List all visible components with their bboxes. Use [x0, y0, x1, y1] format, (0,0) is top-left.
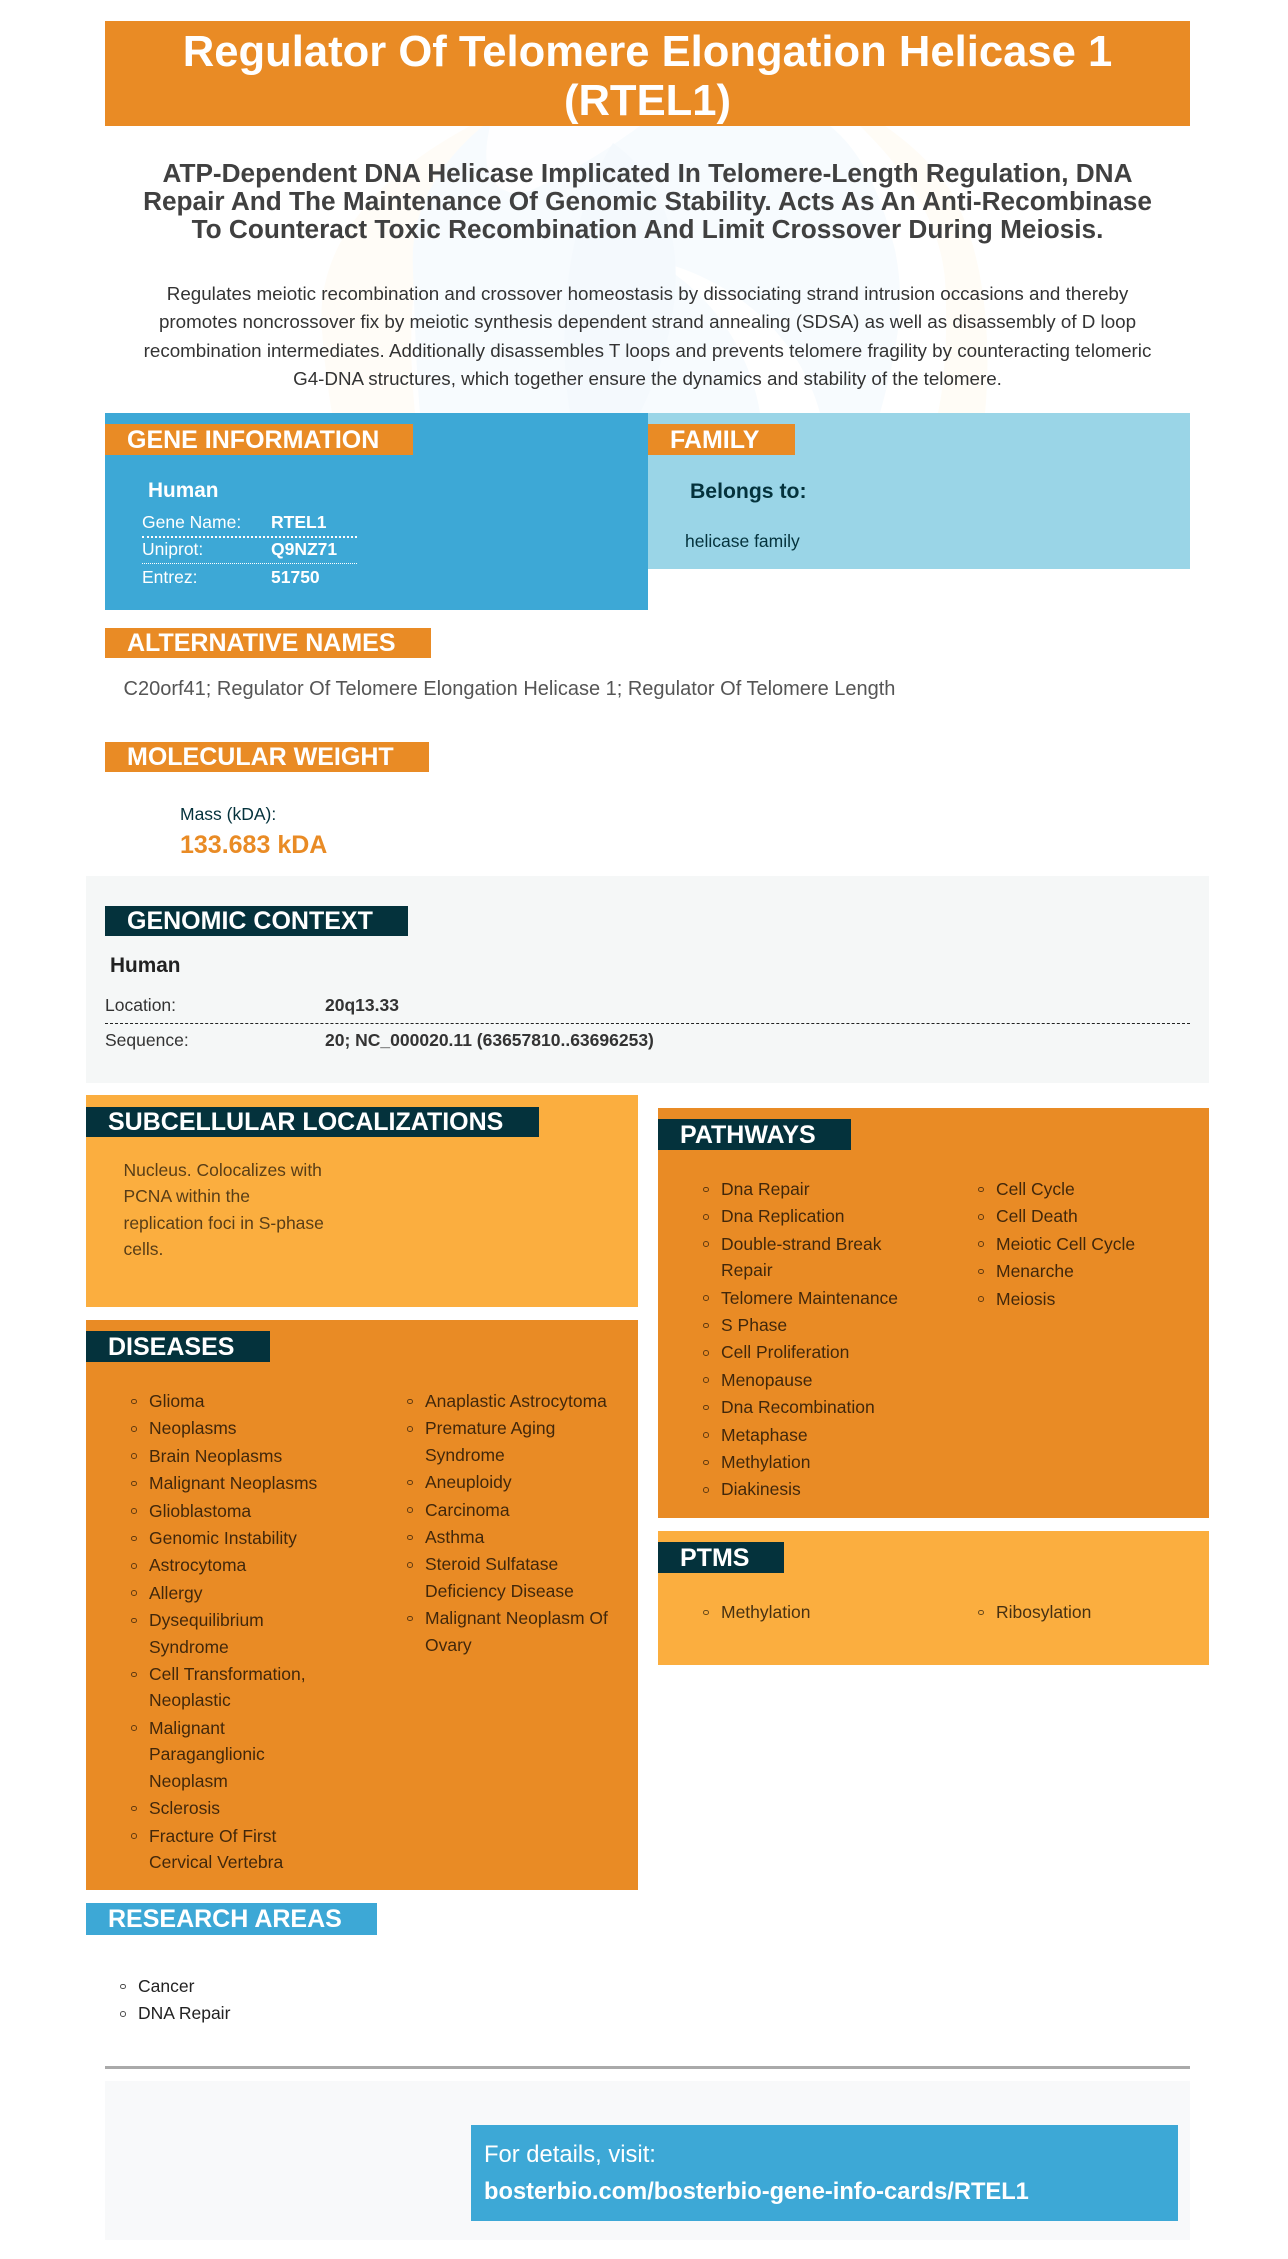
description paragraph: G4-DNA structures, which together ensure the dynamics and stability of the telomere.	[293, 368, 1002, 389]
ptm list column 2: Ribosylation	[996, 1602, 1091, 1622]
disease list column 2: Carcinoma	[425, 1500, 510, 1520]
disease list column 1: Syndrome	[149, 1637, 229, 1657]
footer divider	[105, 2066, 1190, 2069]
disease list column 1: Neoplasms	[149, 1418, 237, 1438]
disease list column 1: Cervical Vertebra	[149, 1852, 283, 1872]
panel: ptms	[658, 1531, 1209, 1665]
research areas list	[120, 1976, 230, 2023]
disease list column 1: Cell Transformation,	[149, 1664, 306, 1684]
description paragraph	[144, 283, 1151, 389]
species label: Human	[148, 479, 218, 502]
research areas list: DNA Repair	[138, 2003, 230, 2023]
disease list column 1: Malignant	[149, 1718, 225, 1738]
family value: helicase family	[685, 531, 800, 551]
pathway list column 1	[703, 1179, 898, 1499]
pathway list column 1: Menopause	[721, 1370, 812, 1390]
disease list column 1: Dysequilibrium	[149, 1610, 264, 1630]
disease list column 2	[407, 1391, 608, 1655]
alternative names text: C20orf41; Regulator Of Telomere Elongation Helicase 1; Regulator Of Telomere Length	[124, 678, 895, 700]
description paragraph: promotes noncrossover fix by meiotic synthesis dependent strand annealing (SDSA) as well as disassembly of D loop	[159, 311, 1136, 332]
research areas list: Cancer	[138, 1976, 194, 1996]
belongs to label: Belongs to:	[690, 480, 807, 503]
localization text: Nucleus. Colocalizes with	[124, 1160, 322, 1180]
background watermark logo	[564, 126, 987, 413]
disease list column 1: Neoplastic	[149, 1690, 231, 1710]
disease list column 2: Asthma	[425, 1527, 484, 1547]
heading: gene information: GENE INFORMATION	[127, 426, 379, 454]
disease list column 1: Genomic Instability	[149, 1528, 297, 1548]
uniprot row: Q9NZ71	[271, 539, 337, 559]
gene name row	[142, 509, 357, 538]
uniprot row	[142, 536, 357, 564]
heading: pathways	[658, 1119, 851, 1150]
entrez row: 51750	[271, 567, 320, 587]
disease list column 2: Steroid Sulfatase	[425, 1554, 558, 1574]
disease list column 1: Allergy	[149, 1583, 202, 1603]
species label: Human	[110, 954, 180, 977]
disease list column 1: Neoplasm	[149, 1771, 228, 1791]
location row: Location:	[105, 995, 176, 1015]
visit label: For details, visit:	[484, 2141, 656, 2168]
sequence row: Sequence:	[105, 1030, 189, 1050]
mass value: 133.683 kDA	[180, 831, 327, 859]
sequence row	[105, 1030, 654, 1050]
localization text: PCNA within the	[124, 1186, 250, 1206]
disease list column 2: Malignant Neoplasm Of	[425, 1608, 608, 1628]
disease list column 1: Sclerosis	[149, 1798, 220, 1818]
url: bosterbio.com/bosterbio-gene-info-cards/RTEL1	[484, 2179, 1029, 2205]
heading: ptms: PTMS	[680, 1544, 749, 1572]
pathway list column 2: Menarche	[996, 1261, 1074, 1281]
disease list column 1: Paraganglionic	[149, 1744, 265, 1764]
heading: diseases: DISEASES	[108, 1333, 234, 1361]
pathway list column 2: Meiosis	[996, 1289, 1055, 1309]
pathway list column 1: Metaphase	[721, 1425, 808, 1445]
ptm list column 1: Methylation	[721, 1602, 810, 1622]
disease list column 2: Syndrome	[425, 1445, 505, 1465]
disease list column 2: Deficiency Disease	[425, 1581, 574, 1601]
mass label: Mass (kDA):	[180, 804, 276, 824]
panel: gene information	[105, 413, 648, 610]
heading: ptms	[658, 1542, 784, 1573]
heading: molecular weight: MOLECULAR WEIGHT	[127, 743, 394, 771]
localization text	[124, 1160, 324, 1259]
pathway list column 1: Dna Repair	[721, 1179, 810, 1199]
description paragraph: recombination intermediates. Additionally disassembles T loops and prevents telomere fragility by counteracting telomeric	[144, 340, 1151, 361]
disease list column 1: Malignant Neoplasms	[149, 1473, 317, 1493]
pathway list column 1: Dna Replication	[721, 1206, 845, 1226]
heading: diseases	[86, 1331, 270, 1362]
localization text: replication foci in S-phase	[124, 1213, 324, 1233]
panel: pathways	[658, 1108, 1209, 1518]
sequence row: 20; NC_000020.11 (63657810..63696253)	[325, 1030, 654, 1050]
panel: family	[648, 413, 1190, 569]
disease list column 2: Premature Aging	[425, 1418, 555, 1438]
heading: genomic context: GENOMIC CONTEXT	[127, 907, 373, 935]
disease list column 1: Fracture Of First	[149, 1826, 276, 1846]
heading: pathways: PATHWAYS	[680, 1121, 816, 1149]
location row: 20q13.33	[325, 995, 399, 1015]
title banner: (RTEL1)	[564, 77, 731, 125]
pathway list column 1: Double-strand Break	[721, 1234, 882, 1254]
disease list column 2: Anaplastic Astrocytoma	[425, 1391, 607, 1411]
heading: family: FAMILY	[670, 426, 759, 454]
heading: alternative names: ALTERNATIVE NAMES	[127, 629, 396, 657]
footer panel	[105, 2081, 1190, 2240]
pathway list column 1: Diakinesis	[721, 1479, 801, 1499]
entrez row	[142, 567, 320, 587]
panel: genomic context	[86, 876, 1209, 1083]
entrez row: Entrez:	[142, 567, 197, 587]
disease list column 1	[131, 1391, 317, 1872]
subtitle: ATP-Dependent DNA Helicase Implicated In Telomere-Length Regulation, DNA	[162, 158, 1133, 188]
location row	[105, 992, 1190, 1024]
pathway list column 1: S Phase	[721, 1315, 787, 1335]
pathway list column 2: Meiotic Cell Cycle	[996, 1234, 1135, 1254]
title banner	[105, 21, 1190, 126]
subtitle	[143, 158, 1152, 244]
description paragraph: Regulates meiotic recombination and crossover homeostasis by dissociating strand intrusion occasions and thereby	[167, 283, 1128, 304]
call to action box	[471, 2125, 1178, 2221]
disease list column 1: Astrocytoma	[149, 1555, 246, 1575]
title banner: Regulator Of Telomere Elongation Helicase 1	[183, 28, 1112, 76]
subtitle: Repair And The Maintenance Of Genomic Stability. Acts As An Anti-Recombinase	[143, 186, 1152, 216]
gene name row: Gene Name:	[142, 512, 241, 532]
disease list column 1: Glioblastoma	[149, 1501, 251, 1521]
pathway list column 2: Cell Cycle	[996, 1179, 1075, 1199]
gene name row: RTEL1	[271, 512, 326, 532]
pathway list column 1: Telomere Maintenance	[721, 1288, 898, 1308]
disease list column 2: Aneuploidy	[425, 1472, 512, 1492]
pathway list column 1: Cell Proliferation	[721, 1342, 849, 1362]
pathway list column 1: Repair	[721, 1260, 773, 1280]
pathway list column 1: Dna Recombination	[721, 1397, 875, 1417]
disease list column 2: Ovary	[425, 1635, 472, 1655]
disease list column 1: Glioma	[149, 1391, 204, 1411]
disease list column 1: Brain Neoplasms	[149, 1446, 282, 1466]
uniprot row: Uniprot:	[142, 539, 203, 559]
localization text: cells.	[124, 1239, 163, 1259]
heading: family	[648, 424, 795, 455]
heading: subcellular localizations: SUBCELLULAR LOCALIZATIONS	[108, 1108, 503, 1136]
pathway list column 1: Methylation	[721, 1452, 810, 1472]
panel: diseases	[86, 1320, 638, 1890]
pathway list column 2	[978, 1179, 1135, 1309]
panel: subcellular localizations	[86, 1095, 638, 1307]
heading: research areas: RESEARCH AREAS	[108, 1905, 342, 1933]
subtitle: To Counteract Toxic Recombination And Limit Crossover During Meiosis.	[192, 214, 1103, 244]
pathway list column 2: Cell Death	[996, 1206, 1078, 1226]
